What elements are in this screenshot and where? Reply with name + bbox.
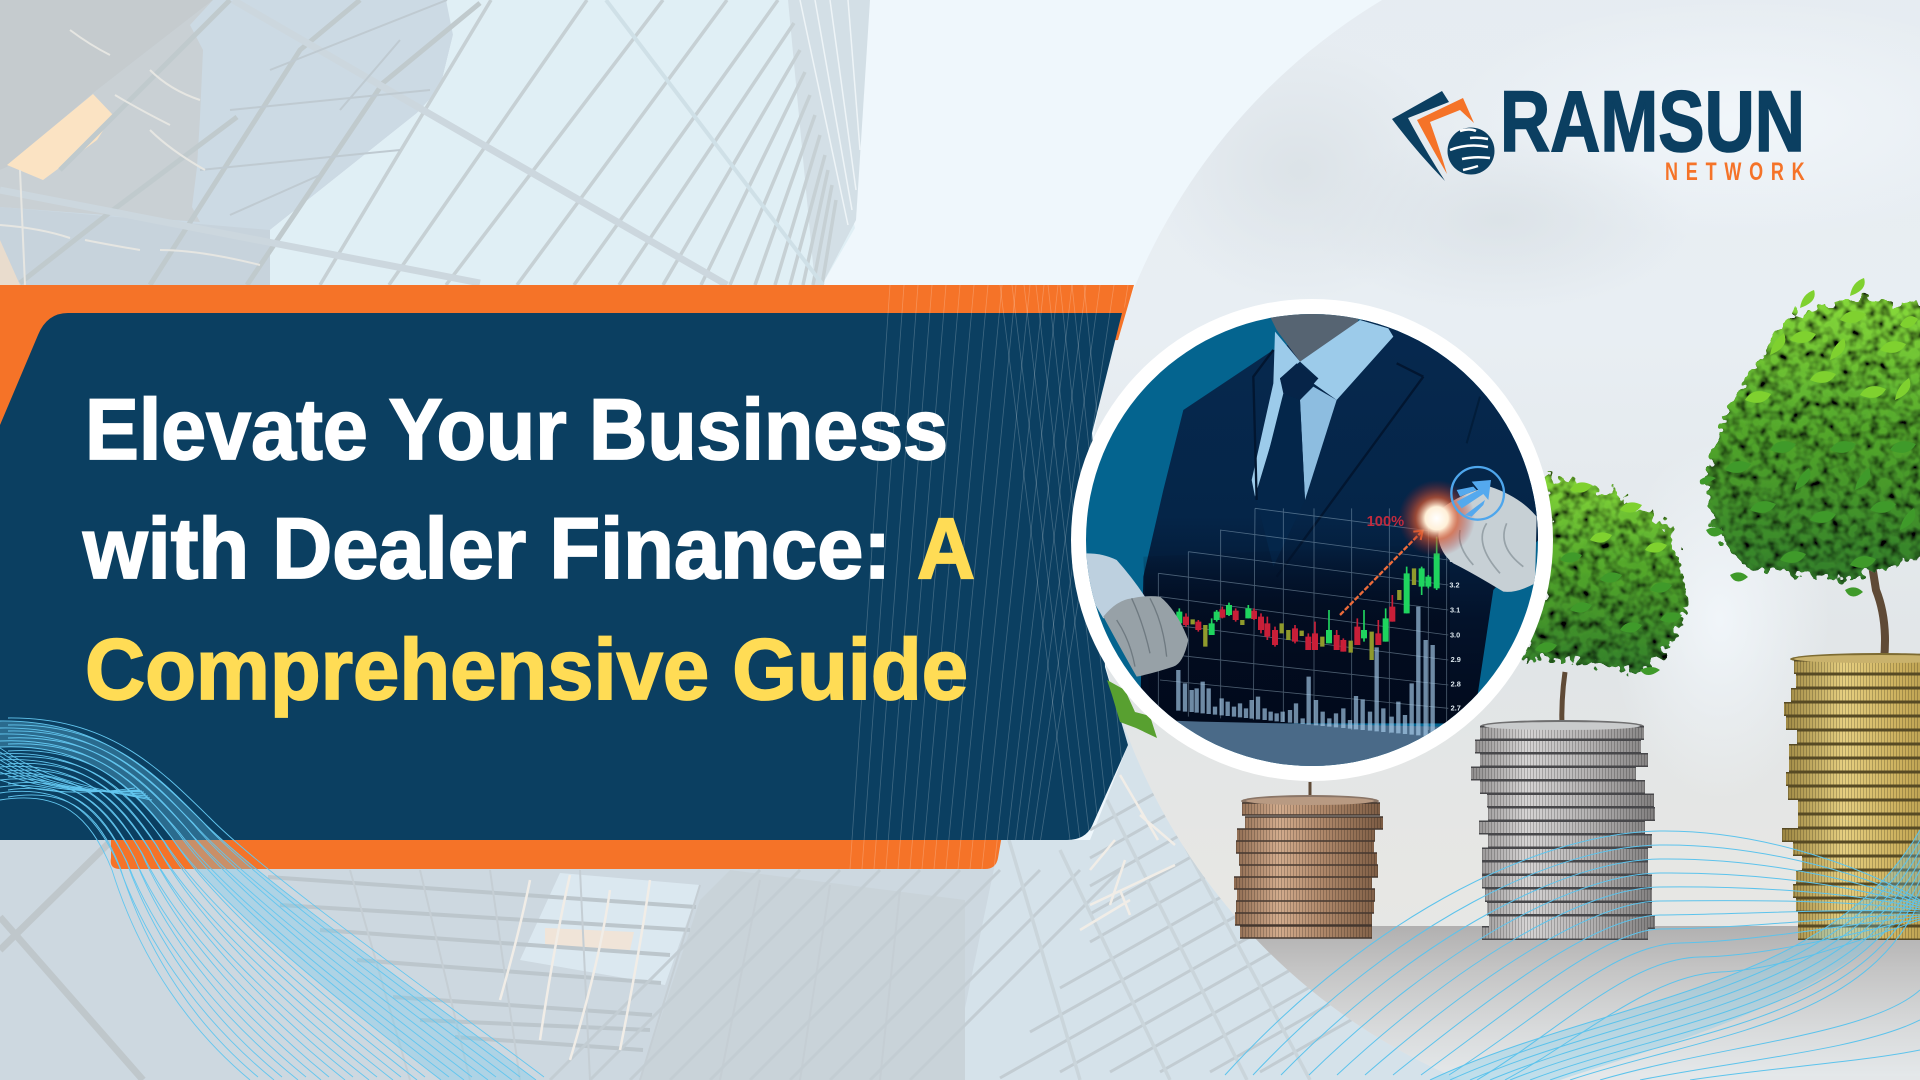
axis labels: 3.0: [1450, 630, 1460, 639]
axis labels: 3.1: [1450, 605, 1460, 614]
axis labels: 2.9: [1451, 655, 1461, 664]
title: Elevate Your Business: [85, 382, 948, 478]
axis labels: 2.7: [1451, 704, 1461, 713]
candlesticks: [1162, 607, 1392, 652]
suit: [1140, 310, 1553, 723]
lapels and lower shirt: [1252, 310, 1480, 577]
tree: large: [1700, 278, 1920, 660]
circular photo backdrop: [1088, 0, 1920, 1080]
phone: [1087, 553, 1145, 618]
axis labels: 3.3: [1449, 555, 1460, 564]
axis labels: [1450, 560, 1461, 710]
title: with Dealer Finance:: [82, 501, 891, 597]
logo: [1392, 74, 1805, 186]
logo: RAMSUN: [1500, 74, 1805, 170]
blue arrow badge: [1451, 467, 1504, 520]
wave mesh bottom left: [0, 718, 544, 1080]
glow: [1398, 480, 1475, 557]
orange band bottom: [111, 835, 1002, 869]
navy title panel: [0, 313, 1128, 840]
100 percent label: 100%: [1367, 514, 1404, 530]
background building top: [0, 0, 870, 285]
logo: NETWORK: [1665, 157, 1805, 186]
coin stack: silver: [1471, 720, 1655, 933]
fine line pattern over panel: [850, 285, 1130, 869]
wave mesh bottom right: [1225, 830, 1920, 1080]
title: Comprehensive Guide: [85, 622, 968, 718]
axis labels: 3.4: [1449, 530, 1460, 539]
grid: [1158, 508, 1448, 733]
arrow: [1340, 532, 1422, 615]
axis labels: 3.2: [1449, 580, 1460, 589]
circular photo: businessman with stock chart: [1080, 310, 1553, 777]
title: [82, 382, 975, 718]
chart backdrop: [1143, 543, 1450, 723]
floor: [1176, 720, 1440, 766]
small leaf behind circle: [1107, 680, 1157, 738]
logo icon: papers and globe: [1392, 91, 1494, 181]
left hand: [1103, 596, 1188, 677]
right hand: [1438, 487, 1537, 592]
axis labels: 2.8: [1451, 680, 1461, 689]
background building bottom: [0, 655, 1500, 1080]
coin stack: gold: [1782, 653, 1920, 933]
volume bars: [1178, 607, 1433, 737]
orange band top: [0, 285, 1134, 430]
coin stack: bronze: [1234, 782, 1383, 932]
title: A: [917, 501, 975, 597]
tree: medium: [1521, 474, 1687, 730]
circular photo ring: [1071, 299, 1553, 781]
